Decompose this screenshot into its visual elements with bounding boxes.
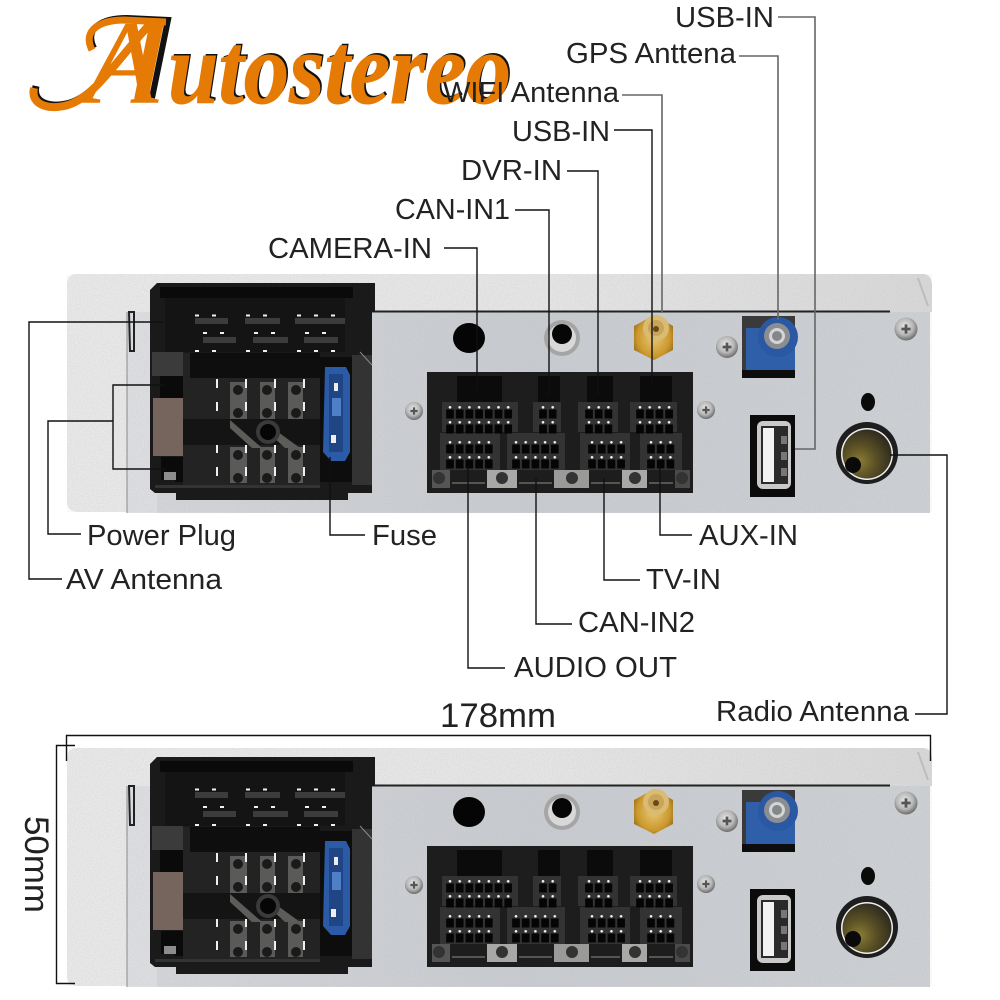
callout: CAN-IN1: CAN-IN1 [395,194,510,226]
callout: AUX-IN: AUX-IN [699,520,798,552]
panel: labelled rear view of unit [67,274,932,513]
dimension: width 178mm [66,697,930,761]
logo shadow: utostereo [170,11,513,124]
callout: CAMERA-IN: CAMERA-IN [268,233,432,265]
blue Fakra connector [742,316,798,378]
callout: Radio Antenna [716,455,947,728]
callout: CAN-IN2 [536,478,695,639]
logo letters [33,0,511,129]
callout: CAN-IN2: CAN-IN2 [578,607,695,639]
USB port [750,889,795,971]
multi-pin connector block [427,372,693,493]
dimension: width 178mm: 178mm [440,697,556,735]
callout: DVR-IN [461,155,598,395]
callout: GPS Anttena: GPS Anttena [566,38,737,70]
logo shadow [35,11,513,124]
callout: Radio Antenna: Radio Antenna [716,696,910,728]
device chassis [67,748,932,987]
callout: Power Plug [48,385,236,552]
callout: USB-IN second [512,116,652,385]
power harness connector with fuse [150,757,375,974]
gold SMA antenna connector [634,315,673,360]
mounting screws [405,792,918,894]
dimension: height 50mm [17,746,75,984]
device chassis [67,274,932,513]
callout: USB-IN top: USB-IN [675,2,774,34]
callout: AUDIO OUT: AUDIO OUT [514,652,677,684]
audio jack [544,320,580,356]
multi-pin connector block [427,846,693,967]
radio antenna socket [836,867,898,958]
callout: DVR-IN: DVR-IN [461,155,562,187]
callout: USB-IN top [675,2,815,449]
power harness connector with fuse [150,283,375,500]
callout: AUX-IN [660,468,798,552]
callout: CAN-IN1 [395,194,549,395]
callout: AUDIO OUT [468,467,677,684]
callout: Fuse [330,457,437,552]
callout: WIFI Antenna: WIFI Antenna [443,77,620,109]
callout: AV Antenna: AV Antenna [66,564,223,596]
callout: TV-IN: TV-IN [646,564,721,596]
logo letters: utostereo [168,13,511,126]
panel: dimensioned rear view of unit [67,748,932,987]
logo: Autostereo [33,0,513,129]
radio antenna socket [836,393,898,484]
callout: TV-IN [604,478,721,596]
callout: AV Antenna [29,322,223,596]
blue Fakra connector [742,790,798,852]
callout: WIFI Antenna [443,77,662,312]
callout: GPS Anttena [566,38,778,320]
USB port [750,415,795,497]
callout: Power Plug: Power Plug [87,520,236,552]
gold SMA antenna connector [634,789,673,834]
dimension: height 50mm: 50mm [17,816,55,913]
callout: CAMERA-IN [268,233,477,390]
mounting screws [405,318,918,420]
callout: Fuse: Fuse [372,520,437,552]
audio jack [544,794,580,830]
callout: USB-IN second: USB-IN [512,116,610,148]
round hole [453,797,485,827]
round hole [453,323,485,353]
